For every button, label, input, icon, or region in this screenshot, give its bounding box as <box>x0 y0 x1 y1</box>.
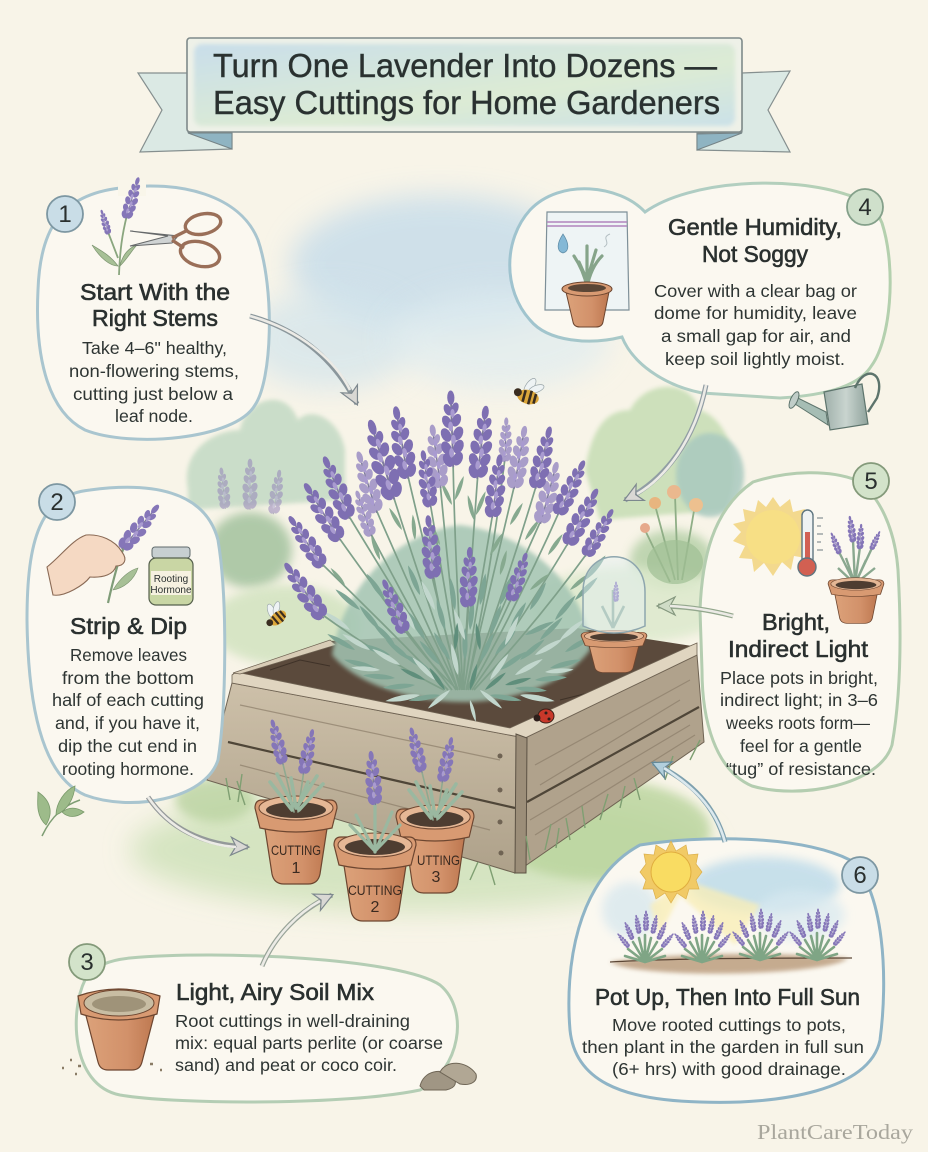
watermark: PlantCareToday <box>757 1120 914 1144</box>
lavender bush <box>275 390 621 722</box>
badge 3: 3 <box>80 949 94 976</box>
icon: sun with rays <box>640 841 702 903</box>
panel 1 outline <box>38 186 269 439</box>
badge 4 <box>847 189 883 225</box>
body 2: half of each cutting <box>52 690 204 710</box>
body 4: keep soil lightly moist. <box>665 349 845 369</box>
icon: small lavender pot <box>827 515 884 623</box>
bush stems <box>320 458 588 690</box>
body 6 <box>582 1015 864 1079</box>
badge 5 <box>853 463 889 499</box>
body 5: weeks roots form— <box>725 713 870 733</box>
arrow 3 <box>262 895 332 966</box>
badge 3 <box>69 944 105 980</box>
panel 5: bright indirect light <box>700 463 900 791</box>
soil <box>235 628 692 729</box>
corner post <box>515 734 527 873</box>
body 3: sand) and peat or coco coir. <box>175 1055 397 1075</box>
panel 2: strip and dip <box>27 484 225 802</box>
pot: cutting 3 <box>396 726 474 893</box>
bed right front wall <box>515 655 704 873</box>
icon: soil pot <box>62 989 162 1074</box>
banner wash <box>194 44 735 126</box>
pot: cutting 1: 1 <box>292 860 301 877</box>
icon: sky wash <box>602 857 845 940</box>
panel 2 outline <box>27 487 225 802</box>
panel 6 outline <box>569 839 884 1102</box>
badge 1 <box>47 196 83 232</box>
pot: cutting 2: 2 <box>371 899 380 916</box>
icon: watering can <box>787 374 879 430</box>
body 2: and, if you have it, <box>55 713 200 733</box>
bush dark leaves <box>399 623 532 692</box>
body 6: Move rooted cuttings to pots, <box>612 1015 846 1035</box>
badge 1: 1 <box>58 201 72 228</box>
body 4: Cover with a clear bag or <box>654 281 857 301</box>
body 1: leaf node. <box>115 406 193 426</box>
bed top rim <box>232 643 697 738</box>
title banner <box>138 38 790 152</box>
badge 4: 4 <box>858 194 872 221</box>
bed left front wall <box>207 683 525 873</box>
body 2: rooting hormone. <box>62 759 194 779</box>
glass dome pot <box>581 557 647 673</box>
heading 5 line 2: Indirect Light <box>728 636 869 662</box>
body 1: cutting just below a <box>73 384 233 404</box>
panel 1: start with the right stems <box>38 175 269 439</box>
badge 2 <box>39 484 75 520</box>
panel 3: light airy soil mix <box>62 944 476 1102</box>
badge 6 <box>842 857 878 893</box>
bee upper <box>512 373 547 408</box>
title line 2: Easy Cuttings for Home Gardeners <box>213 84 720 121</box>
icon: hand <box>47 535 125 595</box>
ribbon folds <box>188 133 742 150</box>
heading 5: Bright, <box>762 609 830 635</box>
bush flower spikes pale <box>347 417 568 540</box>
icon: lavender cutting <box>108 499 166 603</box>
body 2 <box>52 645 204 779</box>
arrow 2 <box>148 797 248 847</box>
body 5: indirect light; in 3–6 <box>720 690 878 710</box>
background flowers <box>640 485 703 584</box>
body 2: from the bottom <box>62 668 194 688</box>
panel 3 outline <box>76 955 457 1102</box>
body 1 <box>69 338 239 426</box>
icon: leaf sprig <box>38 786 84 836</box>
body 3: Root cuttings in well-draining <box>175 1011 410 1031</box>
arrow 4 <box>625 385 706 500</box>
icon: rooting hormone jar: Rooting <box>154 574 188 585</box>
body 4: a small gap for air, and <box>661 326 851 346</box>
icon: rooting hormone jar: Hormone <box>150 585 192 596</box>
body 1: Take 4–6" healthy, <box>82 338 227 358</box>
heading 1: Start With the <box>80 279 230 305</box>
pot: cutting 2: CUTTING <box>348 882 402 898</box>
watercolor garden backdrop <box>130 195 744 912</box>
ladybug <box>534 709 554 723</box>
title line 1: Turn One Lavender Into Dozens — <box>213 47 717 84</box>
body 1: non-flowering stems, <box>69 361 239 381</box>
pot: cutting 1 <box>255 718 337 884</box>
raised wooden bed <box>207 628 704 873</box>
left ribbon tail <box>138 73 232 152</box>
icon: soil strip and plants <box>610 908 852 974</box>
pot: cutting 1: CUTTING <box>271 842 321 858</box>
panel 4: gentle humidity <box>510 183 890 430</box>
icon: bag with pot <box>545 212 629 327</box>
icon: lavender cutting and scissors <box>92 175 223 275</box>
badge 6: 6 <box>853 862 867 889</box>
bush flower spikes <box>275 390 621 638</box>
heading 3: Light, Airy Soil Mix <box>176 979 375 1005</box>
arrow 1 <box>250 316 357 404</box>
bee lower <box>257 596 291 631</box>
body 2: dip the cut end in <box>58 736 197 756</box>
bush pale leaves <box>322 580 586 722</box>
heading 1 line 2: Right Stems <box>92 305 218 331</box>
badge 2: 2 <box>50 489 64 516</box>
body 5: feel for a gentle <box>740 736 862 756</box>
body 6: then plant in the garden in full sun <box>582 1037 864 1057</box>
icon: rooting hormone jar <box>149 547 193 605</box>
background lavender <box>214 459 287 516</box>
body 3: mix: equal parts perlite (or coarse <box>175 1033 443 1053</box>
body 4 <box>654 281 857 369</box>
panel 4 outline <box>510 183 890 398</box>
panel 6: pot up then into full sun <box>569 839 884 1102</box>
body 6: (6+ hrs) with good drainage. <box>612 1059 846 1079</box>
pot: cutting 3: 3 <box>432 869 441 886</box>
bush lower leaves <box>326 554 608 703</box>
body 5: Place pots in bright, <box>720 668 878 688</box>
heading 2: Strip & Dip <box>70 613 187 639</box>
arrow 5 <box>658 606 733 616</box>
heading 6: Pot Up, Then Into Full Sun <box>595 984 860 1010</box>
arrow 6 <box>653 763 725 842</box>
grass tufts <box>226 740 700 885</box>
body 5 <box>720 668 878 779</box>
bush upper leaves <box>329 475 591 592</box>
panel 5 outline <box>700 473 900 791</box>
icon: thermometer <box>798 510 823 576</box>
heading 4 line 2: Not Soggy <box>702 241 808 267</box>
icon: sun rays <box>650 880 760 945</box>
icon: sun <box>733 497 814 576</box>
heading 4: Gentle Humidity, <box>668 214 842 240</box>
badge 5: 5 <box>864 468 878 495</box>
body 4: dome for humidity, leave <box>654 303 857 323</box>
banner panel <box>187 38 742 132</box>
body 5: “tug” of resistance. <box>726 759 876 779</box>
icon: rocks <box>420 1063 476 1090</box>
right ribbon tail <box>697 71 790 152</box>
pot: cutting 3: UTTING <box>417 852 460 868</box>
body 2: Remove leaves <box>70 645 187 665</box>
pot: cutting 2 <box>334 750 416 921</box>
bush foliage mound <box>332 525 590 702</box>
body 3 <box>175 1011 443 1075</box>
